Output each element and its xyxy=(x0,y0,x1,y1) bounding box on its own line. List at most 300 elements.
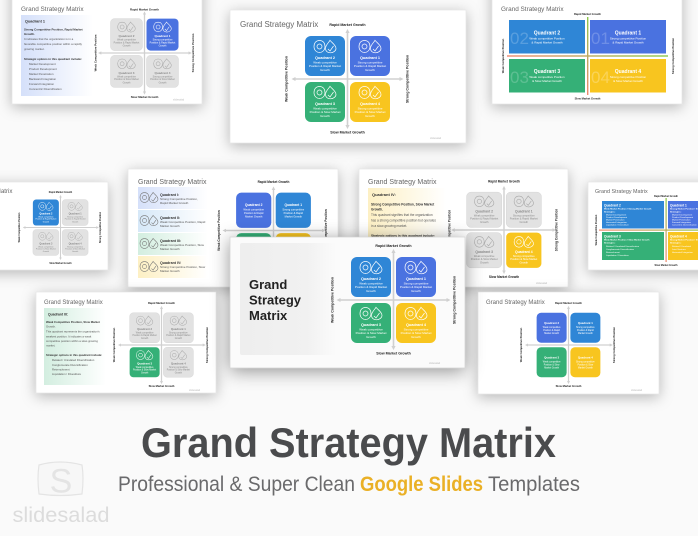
matrix: colour quadrants: Quadrant 4 xyxy=(578,356,593,360)
tile: quadrant 3 strategies xyxy=(602,232,664,260)
panel: quadrant 1 description: favorable competitive position within a rapidly xyxy=(24,42,83,46)
slide: quadrant 2 detail, left edge xyxy=(0,182,108,270)
axis labels: Weak Competitive Position xyxy=(595,214,598,245)
main title: Grand Strategy Matrix xyxy=(141,419,557,466)
matrix: four colour quadrants: Position & Rapid Market xyxy=(309,64,341,68)
matrix: quadrant 1 highlighted: Growth xyxy=(159,81,167,84)
tile: quadrant 3 strategies: Conglomerate Diversification xyxy=(606,248,635,251)
matrix: colour quadrants: Quadrant 1 xyxy=(285,203,302,207)
panel: quadrant 1 description: Growth. xyxy=(24,32,35,36)
panel: quadrant IV description: in a slow-growing market. xyxy=(371,224,407,228)
matrix: colour quadrants: Weak competitive xyxy=(543,326,561,329)
matrix: quadrant 3 highlighted: Slow Market Growth xyxy=(149,384,175,388)
panel: quadrant 1 description: It indicates that the organization is in a xyxy=(24,37,74,41)
tile: quadrant 2: Quadrant 2 xyxy=(534,30,560,36)
matrix: four colour quadrants: Weak competitive xyxy=(313,106,337,110)
matrix: quadrant 4 highlighted: Quadrant 3 xyxy=(475,250,493,254)
tile: quadrant 3 strategies: Related / Unrelated Diversification xyxy=(606,245,640,248)
matrix: quadrant 3 highlighted: Strong Competitive Position xyxy=(205,327,209,363)
slide title: Grand Strategy Matrix xyxy=(595,189,648,195)
panel: quadrant III description: Growth. xyxy=(46,324,56,328)
matrix: quadrant 1 highlighted: Rapid Market Growth xyxy=(130,8,159,12)
panel: quadrant 1 description: growing market. xyxy=(24,47,45,51)
panel: quadrant III description: Strategic options in this quadrant include: xyxy=(46,353,102,357)
subtitle: Templates xyxy=(488,472,580,496)
matrix: quadrant 2 highlighted: Position & Slow Market xyxy=(65,248,86,251)
matrix: four colour quadrants: Position & Slow Market xyxy=(356,331,387,335)
matrix: quadrant 1 highlighted: Strong competitive xyxy=(153,39,173,42)
matrix: four colour quadrants: Strong competitive xyxy=(358,106,383,110)
panel: quadrant 1 description xyxy=(21,15,93,96)
panel: slide heading: Matrix xyxy=(249,308,288,323)
matrix: quadrant 4 highlighted: Growth xyxy=(480,220,489,224)
panel: quadrant 1 description: Concentric Diversification xyxy=(29,87,62,91)
matrix: four colour quadrants: Slow Market Growth xyxy=(376,352,411,356)
matrix: colour quadrants: Quadrant 1 xyxy=(578,321,593,325)
matrix: quadrant 3 highlighted: Growth xyxy=(175,337,183,340)
matrix: four colour quadrants: Strong competitive xyxy=(404,282,429,286)
list row: quadrant IV: Quadrant IV: xyxy=(160,261,181,265)
matrix: four colour quadrants: Weak competitive xyxy=(359,282,383,286)
matrix: colour quadrants: Market Growth xyxy=(285,214,302,218)
tile: quadrant 3: & Slow Market Growth xyxy=(532,79,562,83)
matrix: four colour quadrants: Growth xyxy=(366,335,376,339)
tile: quadrant 1 strategies: Market Penetration xyxy=(672,218,691,222)
axis labels: Slow Market Growth xyxy=(655,264,678,267)
matrix: colour quadrants: Position & Rapid xyxy=(543,329,561,332)
panel: quadrant IV description: has a strong competitive position but operates xyxy=(371,218,436,222)
axis labels xyxy=(595,195,679,267)
matrix: quadrant 1 highlighted: Growth xyxy=(123,45,131,48)
matrix: four colour quadrants: Strong competitive xyxy=(358,60,383,64)
matrix: four colour quadrants: Slow Market Growth xyxy=(330,130,365,134)
matrix: colour quadrants: Rapid Market Growth xyxy=(555,301,582,305)
list row: quadrant IV: Market Growth xyxy=(160,269,180,273)
slide: strategies in quadrants, right edge xyxy=(588,182,698,270)
panel: quadrant IV description: Quadrant IV: xyxy=(372,192,396,197)
matrix: quadrant 3 highlighted: Position & Rapid Market xyxy=(166,334,191,337)
panel: quadrant III description: Related / Unrelated Diversification xyxy=(52,358,95,362)
matrix: quadrant 3 highlighted: Weak competitive xyxy=(136,366,154,369)
tile: quadrant 1 strategies: Market Development xyxy=(672,214,693,216)
panel: slide heading: Strategy xyxy=(249,292,302,308)
matrix: four colour quadrants: Quadrant 2 xyxy=(315,56,335,60)
tile: quadrant 2 xyxy=(509,20,585,54)
matrix: quadrant 1 highlighted: Position & Slow Market xyxy=(114,78,139,81)
slide footer: slidesalad xyxy=(631,389,643,392)
matrix: quadrant 2 highlighted: Growth xyxy=(43,220,49,223)
panel: quadrant 1 description: Quadrant 1 xyxy=(25,20,45,24)
matrix: four colour quadrants: Position & Rapid Market xyxy=(400,285,432,289)
matrix: quadrant 2 highlighted: Growth xyxy=(72,250,78,253)
axis arrows xyxy=(507,17,668,95)
tile: quadrant 4 strategies: Horizontal Integration xyxy=(672,251,694,254)
matrix: quadrant 1 highlighted xyxy=(94,8,195,99)
matrix: quadrant 3 highlighted: Position & Slow Market xyxy=(167,369,190,372)
tile: quadrant 4: Quadrant 4 xyxy=(615,69,641,75)
matrix: quadrant 4 highlighted: Strong competitive xyxy=(513,254,535,258)
matrix: quadrant 1 highlighted: Strong competitive xyxy=(153,75,173,78)
tile: quadrant 2: 02 xyxy=(510,29,529,48)
list row: quadrant I xyxy=(138,187,208,209)
slide: quadrant list, middle left xyxy=(128,169,338,287)
axis labels xyxy=(501,12,675,100)
matrix: quadrant 3 highlighted: Position & Slow Market xyxy=(133,369,157,372)
matrix: four colour quadrants: Growth xyxy=(365,68,375,72)
list row: quadrant IV: Strong Competitive Position, Slow xyxy=(160,265,206,269)
tile: quadrant 4 xyxy=(590,59,666,92)
tile: quadrant 1: Strong competitive Position xyxy=(610,36,647,40)
tile: quadrant 2: Weak competitive Position xyxy=(529,36,565,40)
matrix: quadrant 1 highlighted: Growth xyxy=(159,45,167,48)
matrix: quadrant 2 highlighted: Weak Competitive Position xyxy=(18,212,21,242)
tile: quadrant 4: & Slow Market Growth xyxy=(613,79,643,83)
panel: quadrant IV description: Strategic options in this quadrant include: xyxy=(371,234,435,238)
list row: quadrant I: Rapid Market Growth xyxy=(160,201,189,205)
matrix: quadrant 3 highlighted: Growth xyxy=(175,372,183,375)
tile: quadrant 4 strategies: Strategies: xyxy=(670,242,682,244)
matrix: quadrant 3 highlighted: Growth xyxy=(141,372,149,375)
matrix: colour quadrants: Position & Slow xyxy=(578,363,594,366)
matrix: four colour quadrants: Position & Rapid Market xyxy=(354,64,386,68)
axis labels: Rapid Market Growth xyxy=(574,12,601,16)
tile: quadrant 2 strategies: Market Development xyxy=(606,214,627,216)
tile: quadrant 4 strategies xyxy=(668,232,698,260)
tile: quadrant 4 strategies: Quadrant 4 xyxy=(670,234,687,238)
matrix: colour quadrants: Market Growth xyxy=(544,366,560,369)
slide title: Grand Strategy Matrix xyxy=(21,6,84,13)
matrix: colour quadrants: Market Growth xyxy=(578,366,593,369)
matrix: quadrant 1 highlighted: Weak competitive xyxy=(117,75,137,78)
tile: quadrant 1 strategies: Forward Integration xyxy=(672,221,692,224)
tile: quadrant 1: Quadrant 1 xyxy=(615,30,641,36)
matrix: quadrant 1 highlighted: Position & Rapid Market xyxy=(114,41,140,44)
matrix: colour quadrants: Strong competitive xyxy=(282,207,305,211)
matrix: quadrant 1 highlighted: Growth xyxy=(123,81,131,84)
list row: quadrant I: Quadrant I: xyxy=(160,193,179,197)
matrix: quadrant 2 highlighted: Rapid Market Growth xyxy=(49,191,73,194)
matrix: quadrant 3 highlighted: Quadrant 3 xyxy=(137,362,153,366)
slide: text-only matrix, bottom right xyxy=(478,292,659,394)
list row: quadrant IV xyxy=(138,256,208,278)
matrix: four colour quadrants xyxy=(284,23,410,134)
slide title: Grand Strategy Matrix xyxy=(501,6,564,13)
matrix: quadrant 4 highlighted: Quadrant 4 xyxy=(515,250,533,254)
tile: quadrant 2 strategies: Weak Market Position / Strong Market Growth xyxy=(604,208,652,210)
matrix: quadrant 2 highlighted: Position & Rapid Market xyxy=(65,218,86,221)
tile: quadrant 1 xyxy=(590,20,666,54)
matrix: colour quadrants: Position & Slow xyxy=(544,363,560,366)
list row: quadrant III: Weak Competitive Position, Slow xyxy=(160,243,205,247)
tile: quadrant 1: & Rapid Market Growth xyxy=(612,40,644,44)
matrix: quadrant 2 highlighted: Position & Rapid Market xyxy=(35,218,57,221)
tile: quadrant 3 strategies: Strategies: xyxy=(604,242,616,244)
panel: quadrant IV description: Strong Competitive Position, Slow Market xyxy=(371,202,435,206)
panel: quadrant 1 description: Market Penetration xyxy=(29,72,54,76)
tile: quadrant 2 strategies: Liquidation / Divestiture xyxy=(606,224,630,226)
panel: quadrant III description: Weak Competitive Position, Slow Market xyxy=(46,320,100,324)
matrix: colour quadrants: Strong Competitive Position xyxy=(612,327,616,363)
panel: quadrant III description: Quadrant III: xyxy=(48,312,68,316)
tile: quadrant 4 strategies: Related / Unrelated xyxy=(672,245,692,248)
matrix: colour quadrants: Slow Market Growth xyxy=(556,384,582,388)
matrix: quadrant 1 highlighted: Position & Slow Market xyxy=(150,78,175,81)
tile: quadrant 1 strategies: Concentric Diversification xyxy=(672,224,697,226)
slide: rectangular quadrants with numbers, top right xyxy=(492,0,682,104)
matrix: colour quadrants: Weak Competitive Position xyxy=(519,327,523,362)
matrix: four colour quadrants: Growth xyxy=(320,68,330,72)
matrix: quadrant 4 highlighted: Position & Rapid Market xyxy=(470,216,499,220)
subtitle: Professional & Super Clean xyxy=(118,472,355,496)
panel: quadrant 1 description: Strong Competitive Position, Rapid Market xyxy=(24,28,83,32)
panel: quadrant III description: Retrenchment xyxy=(52,368,70,372)
matrix: colour quadrants xyxy=(217,180,328,273)
tile: quadrant 3 strategies: Liquidation / Divestiture xyxy=(606,254,630,257)
slide footer: slidesalad xyxy=(173,98,185,102)
panel: quadrant 1 description: Backward Integration xyxy=(29,77,57,81)
slide footer: slidesalad xyxy=(429,362,441,365)
tile: quadrant 4 strategies: Joint Ventures xyxy=(672,248,687,251)
list row: quadrant II: Market Growth xyxy=(160,224,180,228)
matrix: quadrant 3 highlighted: Rapid Market Growth xyxy=(148,301,175,305)
matrix: quadrant 2 highlighted: Quadrant 4 xyxy=(69,242,82,245)
list row: quadrant II: Quadrant II: xyxy=(160,216,180,220)
matrix: quadrant 3 highlighted: Quadrant 4 xyxy=(171,362,186,366)
matrix: quadrant 2 highlighted: Weak competitive xyxy=(38,215,54,218)
tile: quadrant 3: Quadrant 3 xyxy=(534,69,560,75)
panel: quadrant 1 description: Strategic options in this quadrant include: xyxy=(24,57,82,61)
axis labels: Slow Market Growth xyxy=(575,96,601,100)
matrix: quadrant 3 highlighted: Strong competitive xyxy=(169,366,188,369)
matrix: four colour quadrants: Position & Rapid Market xyxy=(355,285,387,289)
list row: quadrant I: Strong Competitive Position, xyxy=(160,197,198,201)
axis labels: Weak Competitive Position xyxy=(501,38,505,73)
matrix: colour quadrants: Position & Rapid xyxy=(284,211,304,215)
matrix: quadrant 2 highlighted: Strong competitive xyxy=(67,245,83,248)
matrix: four colour quadrants: Quadrant 3 xyxy=(315,102,335,106)
matrix: quadrant 1 highlighted: Strong Competitive Position xyxy=(191,33,195,72)
list row: quadrant II: Weak Competitive Position, Rapid xyxy=(160,220,206,224)
tile: quadrant 3: Weak competitive Position xyxy=(529,75,565,79)
matrix: quadrant 3 highlighted xyxy=(112,301,209,388)
slide footer: slidesalad xyxy=(536,282,548,285)
tile: quadrant 2: & Rapid Market Growth xyxy=(531,40,563,44)
matrix: quadrant 4 highlighted: Weak Competitive Position xyxy=(447,210,451,250)
matrix: four colour quadrants xyxy=(330,244,456,356)
matrix: colour quadrants: Quadrant 2 xyxy=(245,203,263,207)
slide: full colour matrix, top centre xyxy=(230,10,466,143)
matrix: quadrant 1 highlighted: Slow Market Growth xyxy=(131,95,159,99)
matrix: quadrant 3 highlighted: Weak Competitive Position xyxy=(112,327,116,362)
matrix: four colour quadrants: Quadrant 4 xyxy=(360,102,381,106)
matrix: quadrant 2 highlighted xyxy=(18,191,102,265)
tile: quadrant 4: Strong competitive Position xyxy=(610,75,647,79)
matrix: quadrant 2 highlighted: Growth xyxy=(43,250,49,253)
matrix: quadrant 4 highlighted: Growth xyxy=(520,220,529,224)
list row: quadrant III xyxy=(138,233,208,255)
tile: quadrant 1 strategies xyxy=(668,201,698,228)
panel: slide heading xyxy=(240,243,336,355)
matrix: quadrant 2 highlighted: Weak competitive xyxy=(38,245,54,248)
tile: quadrant 1: 01 xyxy=(591,29,610,48)
matrix: four colour quadrants: Weak competitive xyxy=(313,60,337,64)
matrix: four colour quadrants: Strong competitive xyxy=(404,328,429,332)
matrix: quadrant 3 highlighted: Quadrant 1 xyxy=(171,327,186,331)
matrix: four colour quadrants: Quadrant 4 xyxy=(406,323,427,327)
matrix: quadrant 4 highlighted: Position & Rapid Market xyxy=(510,216,538,220)
tile: quadrant 3 strategies: Weak Market Position / Slow Market Growth xyxy=(604,238,650,242)
slide: main title card, centre xyxy=(230,237,465,368)
matrix: colour quadrants: Position & Rapid xyxy=(577,329,594,332)
slide: quadrant IV detail, middle right xyxy=(359,169,568,287)
panel: quadrant III description: market. xyxy=(46,344,56,348)
slide: quadrant 1 detail, top left xyxy=(12,0,202,104)
matrix: quadrant 3 highlighted: Strong competitive xyxy=(169,331,188,334)
matrix: quadrant 1 highlighted: Quadrant 1 xyxy=(154,34,171,38)
subtitle xyxy=(118,472,580,496)
matrix: colour quadrants: Market Growth xyxy=(578,332,593,335)
matrix: four colour quadrants: Weak competitive xyxy=(359,328,383,332)
panel: quadrant III description: competitive position within a slow-growing xyxy=(46,339,98,343)
matrix: quadrant 4 highlighted xyxy=(447,179,559,279)
panel: quadrant IV description: Growth. xyxy=(371,208,383,212)
logo: slidesalad: S xyxy=(50,462,72,500)
matrix: quadrant 2 highlighted: Quadrant 2 xyxy=(39,212,53,215)
matrix: quadrant 4 highlighted: Strong competitive xyxy=(513,213,535,217)
tile: quadrant 4: 04 xyxy=(591,68,610,87)
logo: slidesalad: slidesalad xyxy=(12,503,110,527)
matrix: colour quadrants: Position & Rapid xyxy=(244,211,264,215)
matrix: colour quadrants: Rapid Market Growth xyxy=(258,180,289,184)
tile: quadrant 3 xyxy=(509,59,585,92)
logo: slidesalad xyxy=(12,462,110,527)
tile: quadrant 1 strategies: Quadrant 1 xyxy=(670,204,687,208)
matrix: quadrant 3 highlighted: Position & Rapid Market xyxy=(133,334,157,337)
panel: quadrant 1 description: Product Development xyxy=(29,67,57,71)
list row: quadrant III: Quadrant III: xyxy=(160,239,181,243)
matrix: quadrant 1 highlighted: Position & Rapid Market xyxy=(150,41,176,44)
matrix: quadrant 3 highlighted: Quadrant 2 xyxy=(137,327,153,331)
matrix: quadrant 1 highlighted: Weak Competitive Position xyxy=(93,34,97,71)
matrix: quadrant 1 highlighted: Quadrant 3 xyxy=(118,71,135,75)
matrix: four colour quadrants: Growth xyxy=(320,114,330,118)
matrix: colour quadrants: Weak Competitive Position xyxy=(217,210,221,251)
matrix: four colour quadrants: Growth xyxy=(365,114,375,118)
matrix: quadrant 3 highlighted: Weak competitive xyxy=(136,331,154,334)
panel: quadrant III description: This quadrant represents the organization's xyxy=(46,330,100,334)
tile: quadrant 2 strategies: Market Penetration xyxy=(606,218,625,222)
matrix: quadrant 1 highlighted: Quadrant 2 xyxy=(118,34,135,38)
matrix: quadrant 2 highlighted: Slow Market Growth xyxy=(49,262,72,265)
tile: quadrant 2 strategies xyxy=(602,201,664,228)
matrix: colour quadrants: Strong competitive xyxy=(576,360,595,363)
matrix: four colour quadrants: Strong Competitive Position xyxy=(452,276,456,324)
matrix: quadrant 4 highlighted: Weak competitive xyxy=(474,213,495,217)
panel: quadrant 1 description: Forward Integration xyxy=(29,82,54,86)
matrix: colour quadrants: Quadrant 3 xyxy=(544,356,560,360)
matrix: quadrant 4 highlighted: Growth xyxy=(480,260,489,264)
list row: quadrant III: Market Growth xyxy=(160,247,180,251)
matrix: colour quadrants: Market Growth xyxy=(544,332,560,335)
panel: quadrant IV description: This quadrant signifies that the organization xyxy=(371,213,433,217)
matrix: four colour quadrants: Position & Slow Market xyxy=(310,110,341,114)
axis arrows xyxy=(599,198,698,262)
matrix: quadrant 1 highlighted: Quadrant 4 xyxy=(154,71,171,75)
slide title: Grand Strategy Matrix xyxy=(44,300,103,306)
tile: quadrant 3 strategies: Quadrant 3 xyxy=(604,234,621,238)
slide title: Grand Strategy Matrix xyxy=(486,300,545,306)
panel: quadrant 1 description: Market Development xyxy=(29,62,56,66)
tile: quadrant 2 strategies: Horizontal Integration xyxy=(606,221,628,224)
subtitle: Google Slides xyxy=(360,472,483,496)
matrix: four colour quadrants: Strong Competitive Position xyxy=(406,55,410,103)
tile: quadrant 1 strategies: Product Development xyxy=(672,216,693,219)
panel: quadrant III description: Liquidation / Divestiture xyxy=(52,372,82,376)
matrix: four colour quadrants: Quadrant 1 xyxy=(360,56,380,60)
matrix: four colour quadrants: Quadrant 3 xyxy=(361,323,381,327)
matrix: quadrant 3 highlighted: Growth xyxy=(141,337,149,340)
matrix: quadrant 4 highlighted: Slow Market Growth xyxy=(489,275,519,279)
matrix: four colour quadrants: Growth xyxy=(411,289,421,293)
matrix: quadrant 4 highlighted: Position & Slow Market xyxy=(471,257,498,261)
matrix: quadrant 2 highlighted: Position & Slow Market xyxy=(36,248,56,251)
slide title: Grand Strategy Matrix xyxy=(368,179,437,186)
matrix: four colour quadrants: Quadrant 2 xyxy=(361,277,381,281)
panel: quadrant IV description xyxy=(368,188,446,278)
matrix: quadrant 2 highlighted: Growth xyxy=(72,220,78,223)
matrix: four colour quadrants: Rapid Market Growth xyxy=(375,244,412,248)
tile: quadrant 2 strategies: Quadrant 2 xyxy=(604,204,621,208)
axis labels: Rapid Market Growth xyxy=(654,195,679,198)
matrix: quadrant 4 highlighted: Position & Slow Market xyxy=(510,257,538,261)
list row: quadrant II xyxy=(138,210,208,232)
matrix: colour quadrants: Strong Competitive Position xyxy=(324,209,328,252)
matrix: colour quadrants: Strong competitive xyxy=(576,326,595,329)
matrix: quadrant 2 highlighted: Quadrant 3 xyxy=(39,242,53,245)
tile: quadrant 1 strategies: Strategies: xyxy=(670,210,682,214)
panel: slide heading: Grand xyxy=(249,277,287,292)
matrix: four colour quadrants: Weak Competitive Position xyxy=(284,56,288,102)
tile: quadrant 3: 03 xyxy=(510,68,529,87)
matrix: colour quadrants: Quadrant 2 xyxy=(544,321,560,325)
matrix: quadrant 1 highlighted: Weak competitive xyxy=(117,39,137,42)
axis labels: Strong Competitive Position xyxy=(671,38,675,74)
matrix: quadrant 4 highlighted: Quadrant 1 xyxy=(515,209,533,213)
matrix: colour quadrants: Market Growth xyxy=(245,214,263,218)
matrix: four colour quadrants: Growth xyxy=(411,335,421,339)
slide title: Grand Strategy Matrix xyxy=(138,179,207,186)
tile: quadrant 2 strategies: Strategies: xyxy=(604,210,616,214)
slide footer: slidesalad xyxy=(189,389,201,392)
matrix: quadrant 4 highlighted: Weak competitive xyxy=(474,254,495,258)
matrix: four colour quadrants: Rapid Market Growth xyxy=(329,23,366,27)
panel: quadrant III description: weakest position. It indicates a weak xyxy=(46,334,92,338)
matrix: four colour quadrants: Quadrant 1 xyxy=(406,277,426,281)
slide footer: slidesalad xyxy=(430,137,442,140)
matrix: four colour quadrants: Weak Competitive Position xyxy=(330,277,334,323)
matrix: quadrant 4 highlighted: Growth xyxy=(520,260,529,264)
tile: quadrant 3 strategies: Retrenchment xyxy=(606,251,620,254)
matrix: quadrant 2 highlighted: Strong competitive xyxy=(67,215,83,218)
matrix: quadrant 4 highlighted: Rapid Market Growth xyxy=(488,179,520,183)
matrix: quadrant 4 highlighted: Quadrant 2 xyxy=(475,209,493,213)
matrix: colour quadrants: Weak competitive xyxy=(543,360,561,363)
panel: quadrant III description xyxy=(44,308,106,385)
matrix: colour quadrants: Weak competitive xyxy=(243,207,265,211)
matrix: four colour quadrants: Growth xyxy=(366,289,376,293)
matrix: quadrant 2 highlighted: Quadrant 1 xyxy=(69,212,82,215)
panel: quadrant III description: Conglomerate Diversification xyxy=(52,363,88,367)
